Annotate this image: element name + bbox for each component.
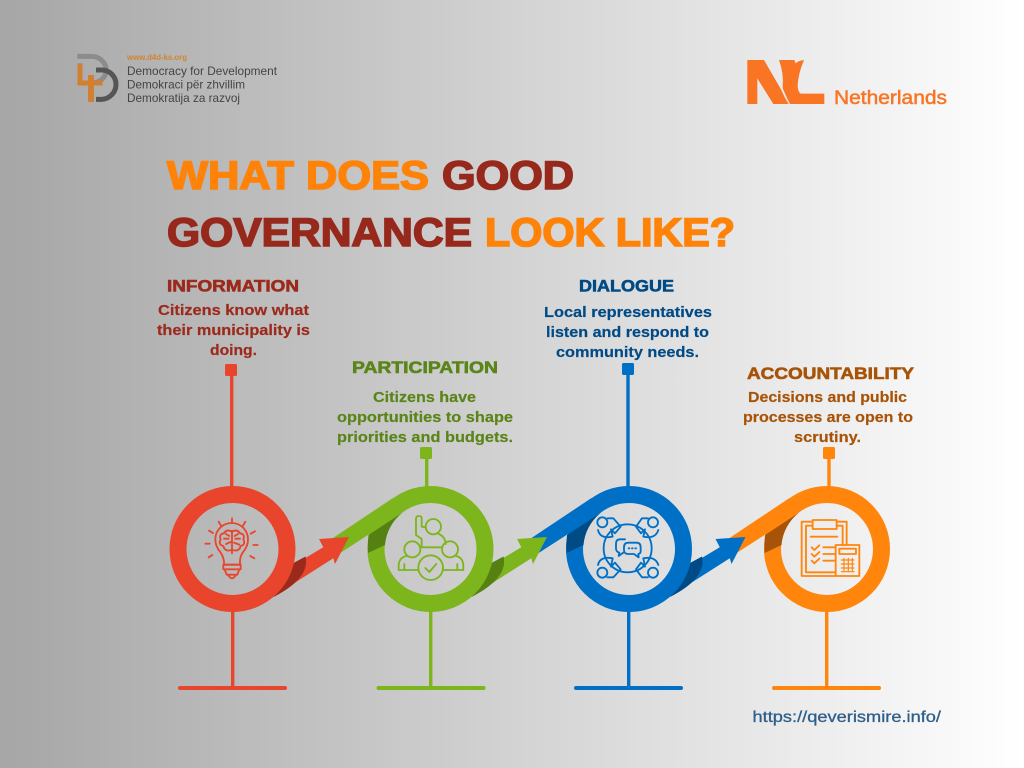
title: WHAT DOES [167,154,429,198]
logo: NL Netherlands [747,60,947,109]
icon: citizens raising hand with check mark [399,516,463,580]
node: dialogue [532,363,746,690]
text block: information: doing. [210,342,257,359]
text block: accountability: Decisions and public [748,389,907,406]
text block: participation: PARTICIPATION [352,358,498,377]
text block: participation: priorities and budgets. [337,429,513,446]
icon: clipboard and calculator [802,520,859,576]
logo: Democracy for Development: www.d4d-ks.org [126,53,187,62]
text block: information [157,276,310,359]
text block: accountability: scrutiny. [794,429,861,446]
text block: dialogue: listen and respond to [546,324,709,341]
text block: accountability: processes are open to [743,409,913,426]
title: GOVERNANCE [167,211,472,255]
text block: participation: Citizens have [373,389,476,406]
icon: people around table with speech bubbles [597,517,658,578]
icon: NL mark [747,60,824,104]
logo: Democracy for Development [77,53,278,105]
node: participation [333,447,547,690]
text block: accountability [743,364,915,446]
text block: information: their municipality is [157,322,310,339]
text block: participation [337,358,513,446]
title [167,154,735,255]
arrow: information to participation [272,537,349,597]
logo: NL Netherlands: Netherlands [834,88,947,109]
logo: Democracy for Development: Demokraci për zhvillim [127,78,245,92]
text block: information: Citizens know what [158,302,309,319]
text block: dialogue: community needs. [556,344,699,361]
text block: participation: opportunities to shape [337,409,513,426]
text block: dialogue [544,276,712,361]
arrow: participation to dialogue [470,537,547,597]
text block: accountability: ACCOUNTABILITY [747,364,915,383]
title: GOOD [442,154,574,198]
arrow: dialogue to accountability [669,537,746,597]
icon: light bulb with brain [205,518,258,578]
title: LOOK LIKE? [485,211,735,255]
logo: Democracy for Development: Demokratija za razvoj [127,91,240,105]
text block: dialogue: Local representatives [544,304,712,321]
logo: Democracy for Development: Democracy for Development [127,64,278,78]
node: accountability [730,447,882,690]
icon: D4D mark [77,56,116,102]
node: information [178,364,349,690]
link: website: https://qeverismire.info/ [752,709,942,726]
text block: information: INFORMATION [167,276,299,296]
text block: dialogue: DIALOGUE [579,276,674,296]
